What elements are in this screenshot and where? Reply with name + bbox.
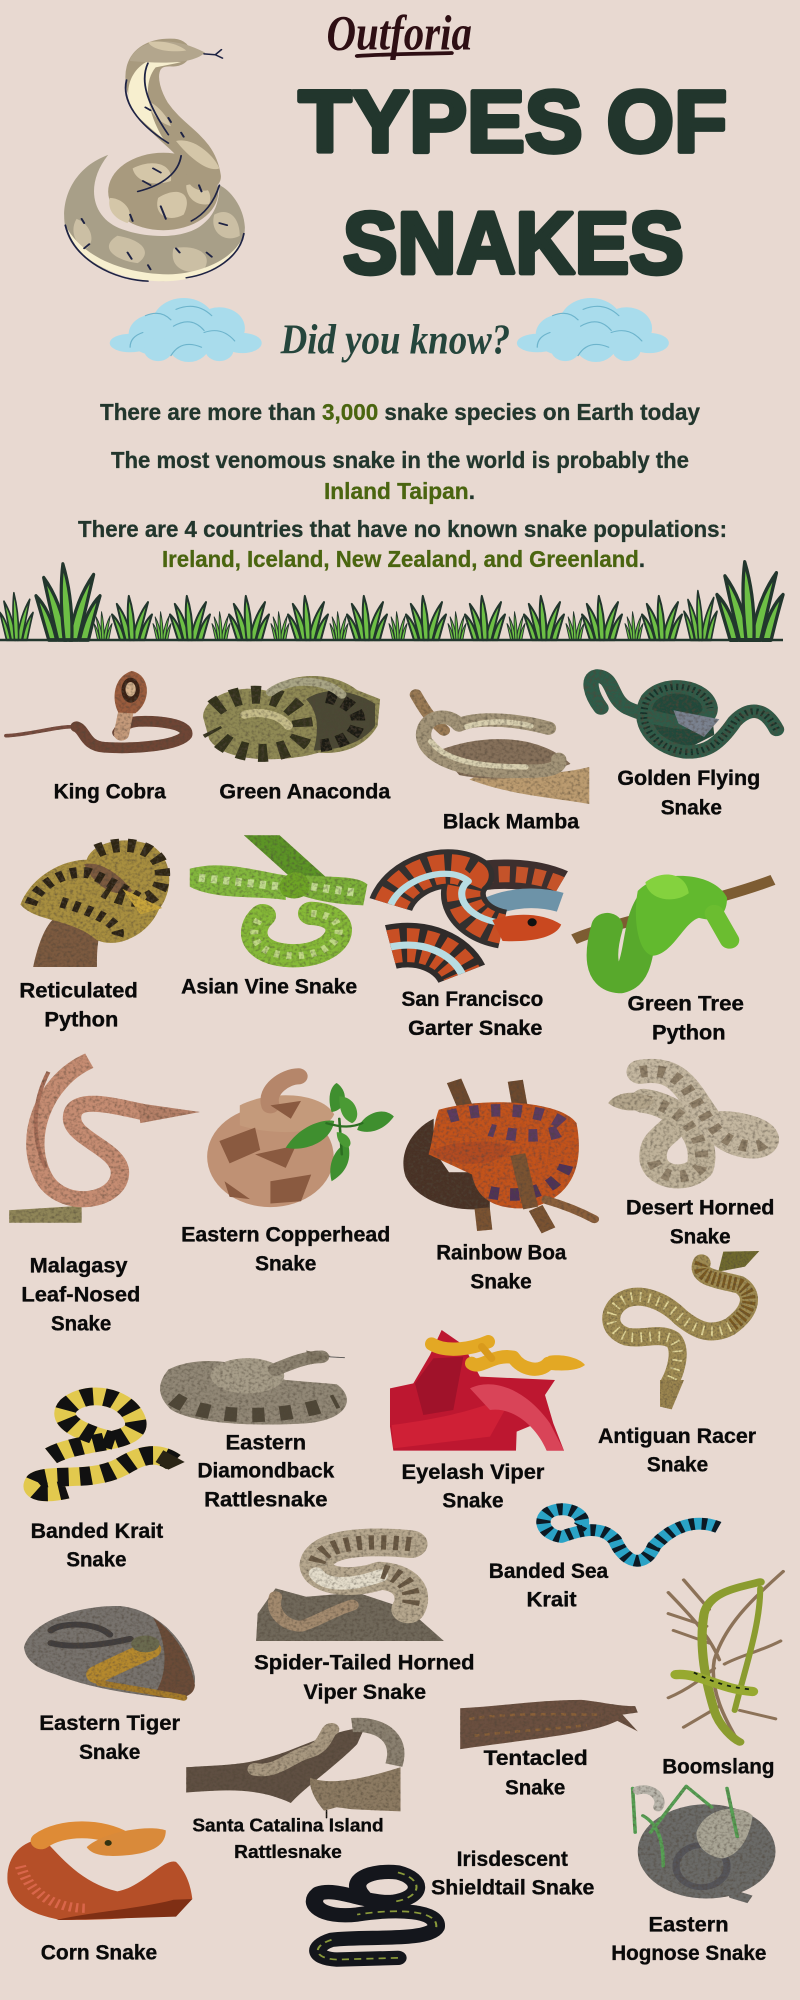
icon: banded krait snake xyxy=(35,1396,185,1492)
label xyxy=(181,1223,390,1275)
label xyxy=(402,1460,544,1512)
snake card: Tentacled Snake xyxy=(460,1700,638,1799)
icon: san francisco garter snake xyxy=(391,869,561,974)
icon: desert horned snake xyxy=(608,1071,765,1176)
icon: right cloud xyxy=(517,298,669,362)
label: Reticulated xyxy=(19,979,138,1002)
label xyxy=(484,1746,588,1799)
icon: eastern copperhead snake xyxy=(207,1076,394,1207)
fact: countries without snakes: Ireland, Iceland, New Zealand, and Greenland. xyxy=(162,546,645,572)
label: Irisdescent xyxy=(457,1847,568,1871)
fact: countries without snakes: There are 4 countries that have no known snake populations: xyxy=(78,516,727,542)
snake card: Banded Krait Snake xyxy=(31,1396,185,1571)
icon: left cloud xyxy=(110,298,262,362)
snake card: Eastern Diamondback Rattlesnake xyxy=(160,1351,347,1511)
snake card: Eyelash Viper Snake xyxy=(390,1330,585,1512)
label: Snake xyxy=(79,1740,140,1763)
fact: most venomous: The most venomous snake in the world is probably the xyxy=(111,447,689,473)
label: Snake xyxy=(66,1548,127,1571)
label: Corn Snake xyxy=(41,1941,157,1964)
label: Banded Sea xyxy=(489,1559,609,1582)
label xyxy=(21,1254,140,1335)
snake card: Reticulated Python xyxy=(19,840,169,1031)
snake card: Rainbow Boa Snake xyxy=(403,1081,594,1293)
label: Snake xyxy=(647,1452,708,1476)
icon: eastern tiger snake xyxy=(24,1606,195,1698)
label xyxy=(431,1847,594,1899)
label: Desert Horned xyxy=(626,1196,774,1219)
icon: king cobra xyxy=(6,671,186,748)
label: Eyelash Viper xyxy=(402,1460,544,1483)
label: Diamondback xyxy=(197,1459,335,1482)
snake card: Eastern Hognose Snake xyxy=(611,1786,776,1964)
title: SNAKES xyxy=(343,194,684,292)
icon: banded sea krait xyxy=(543,1509,718,1561)
label: Python xyxy=(652,1021,726,1044)
label xyxy=(489,1559,609,1611)
snake grid: lower rows xyxy=(7,1251,783,1964)
snake card: Green Anaconda xyxy=(203,676,391,803)
fact: countries without snakes xyxy=(78,516,727,572)
fact: most venomous: Inland Taipan. xyxy=(324,478,475,504)
grass border xyxy=(0,562,783,640)
icon: asian vine snake xyxy=(190,835,367,956)
snake card: Santa Catalina Island Rattlesnake xyxy=(186,1725,401,1863)
icon: corn snake xyxy=(7,1828,192,1920)
icon: tentacled snake xyxy=(460,1700,638,1749)
snake card: Desert Horned Snake xyxy=(608,1071,774,1248)
snake card: Eastern Copperhead Snake xyxy=(181,1076,394,1275)
label: Rattlesnake xyxy=(234,1842,342,1863)
label: Shieldtail Snake xyxy=(431,1876,594,1899)
label: Snake xyxy=(255,1252,316,1275)
label: Garter Snake xyxy=(408,1017,542,1040)
snake card: Irisdescent Shieldtail Snake xyxy=(314,1847,594,1960)
label: Antiguan Racer xyxy=(598,1424,756,1448)
label: Snake xyxy=(670,1225,731,1248)
label: Eastern xyxy=(648,1912,729,1936)
label xyxy=(402,988,543,1040)
label: Viper Snake xyxy=(304,1680,426,1704)
label xyxy=(626,1196,774,1248)
label xyxy=(197,1431,335,1511)
icon: boomslang xyxy=(668,1571,783,1744)
facts text block xyxy=(78,399,727,572)
icon: reticulated python xyxy=(20,840,169,967)
label: Krait xyxy=(527,1588,577,1611)
title xyxy=(298,72,727,292)
label xyxy=(611,1912,766,1964)
label: Banded Krait xyxy=(31,1519,163,1542)
fact: most venomous xyxy=(111,447,689,504)
icon: antiguan racer snake xyxy=(611,1251,759,1409)
icon: eastern hognose snake xyxy=(633,1786,776,1903)
label: Malagasy xyxy=(30,1254,128,1277)
snake card: Banded Sea Krait xyxy=(489,1509,718,1611)
label: Rattlesnake xyxy=(204,1488,328,1511)
label xyxy=(254,1651,474,1704)
icon: green tree python xyxy=(574,874,773,979)
label: Rainbow Boa xyxy=(436,1241,567,1264)
label: Snake xyxy=(661,796,722,819)
label: Asian Vine Snake xyxy=(181,975,357,998)
icon: green anaconda xyxy=(203,676,380,759)
label: Snake xyxy=(470,1270,532,1293)
icon: rainbow boa snake xyxy=(403,1081,594,1230)
label: Snake xyxy=(51,1312,111,1335)
icon: black mamba xyxy=(416,695,589,804)
label: Eastern Copperhead xyxy=(181,1223,390,1246)
icon: golden flying snake xyxy=(591,676,777,752)
snake grid: upper rows xyxy=(6,671,777,1335)
snake card: Corn Snake xyxy=(7,1828,192,1964)
label xyxy=(39,1711,180,1763)
snake card: Asian Vine Snake xyxy=(181,835,367,998)
label xyxy=(617,767,760,819)
brand logo: Outforia: Outforia xyxy=(327,6,472,60)
label: Eastern Tiger xyxy=(39,1711,180,1735)
label: King Cobra xyxy=(54,780,166,803)
icon: santa catalina island rattlesnake xyxy=(186,1725,401,1818)
fact: species count: There are more than 3,000 snake species on Earth today xyxy=(100,399,700,425)
label: Snake xyxy=(505,1776,565,1799)
label: Leaf-Nosed xyxy=(21,1283,140,1306)
snake card: Eastern Tiger Snake xyxy=(24,1606,195,1763)
label: Boomslang xyxy=(662,1755,774,1778)
label: Tentacled xyxy=(484,1746,588,1770)
snake card: Golden Flying Snake xyxy=(591,676,777,819)
label: Green Tree xyxy=(628,992,744,1015)
label: San Francisco xyxy=(402,988,543,1011)
label xyxy=(31,1519,163,1571)
icon: malagasy leaf-nosed snake xyxy=(9,1061,200,1223)
header section xyxy=(64,6,727,363)
label xyxy=(192,1815,384,1863)
icon: eastern diamondback rattlesnake xyxy=(160,1351,347,1424)
label: Eastern xyxy=(226,1431,306,1454)
label: Snake xyxy=(442,1489,504,1512)
snake card: Green Tree Python xyxy=(574,874,773,1044)
label: Black Mamba xyxy=(443,810,580,833)
snake card: San Francisco Garter Snake xyxy=(391,869,561,1040)
heading: did you know: Did you know? xyxy=(280,317,510,363)
snake card: King Cobra xyxy=(6,671,186,803)
snake card: Black Mamba xyxy=(416,695,589,833)
label xyxy=(628,992,744,1044)
snake card: Boomslang xyxy=(662,1571,783,1778)
label: Santa Catalina Island xyxy=(192,1815,384,1836)
label xyxy=(19,979,138,1031)
label: Green Anaconda xyxy=(219,780,391,803)
label: Hognose Snake xyxy=(611,1941,766,1964)
icon: iridescent shieldtail snake xyxy=(314,1872,436,1960)
icon: eyelash viper snake xyxy=(390,1330,585,1451)
snake card: Malagasy Leaf-Nosed Snake xyxy=(9,1061,200,1335)
snake card: Antiguan Racer Snake xyxy=(598,1251,759,1476)
label xyxy=(436,1241,567,1293)
snake card: Spider-Tailed Horned Viper Snake xyxy=(254,1542,474,1704)
label xyxy=(598,1424,756,1476)
label: Python xyxy=(44,1008,118,1031)
icon: illustrated coiled snake xyxy=(64,41,245,281)
icon: spider-tailed horned viper xyxy=(256,1542,444,1641)
label: Golden Flying xyxy=(617,767,760,790)
label: Spider-Tailed Horned xyxy=(254,1651,474,1674)
